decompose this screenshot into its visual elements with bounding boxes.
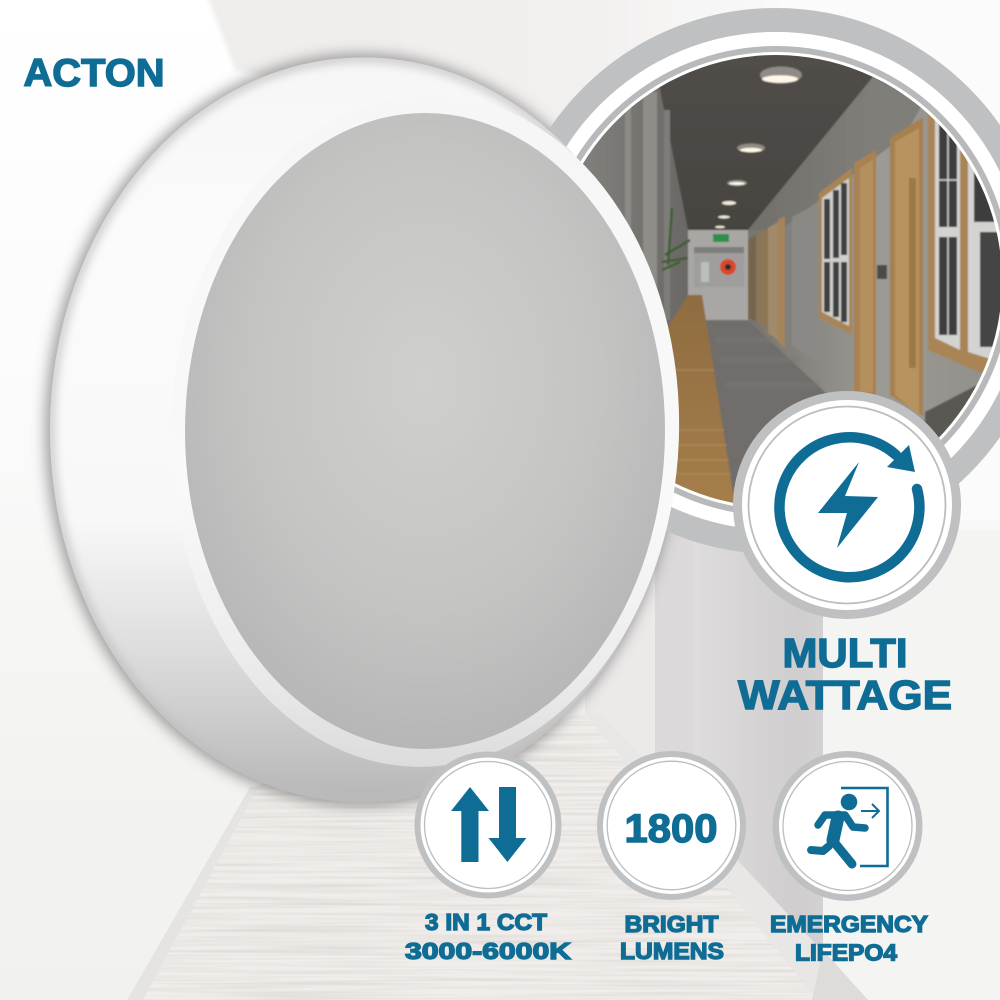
fire reel bbox=[720, 259, 736, 275]
label: emergency LiFePO4: LIFEPO4 bbox=[795, 940, 897, 966]
title: ACTON bbox=[24, 52, 164, 95]
concrete floor bbox=[771, 343, 826, 395]
label: bright lumens: BRIGHT bbox=[624, 911, 719, 937]
far windows and doors bbox=[748, 235, 756, 322]
photo inset: lit corridor bbox=[515, 20, 1000, 542]
big window bbox=[928, 114, 988, 374]
value: 1800: 1800 bbox=[624, 807, 718, 851]
left wall bbox=[583, 100, 642, 250]
label: bright lumens bbox=[620, 911, 724, 964]
badge: emergency bbox=[772, 751, 922, 901]
plant bbox=[662, 208, 690, 270]
door bbox=[854, 150, 876, 395]
big door bbox=[890, 117, 923, 416]
badge: lumens bbox=[597, 751, 746, 900]
product: round bulkhead light bbox=[50, 58, 691, 802]
label: multi wattage: WATTAGE bbox=[738, 672, 952, 718]
exit sign bbox=[713, 234, 729, 242]
icon: power cycle bbox=[779, 437, 919, 577]
label: multi wattage: MULTI bbox=[782, 630, 908, 676]
window near bbox=[819, 168, 852, 335]
right wall bbox=[749, 77, 982, 422]
label: emergency LiFePO4 bbox=[770, 911, 928, 966]
product shadow on wall bbox=[45, 54, 677, 806]
label: emergency LiFePO4: EMERGENCY bbox=[770, 911, 928, 937]
label: 3 in 1 CCT: 3 IN 1 CCT bbox=[425, 909, 548, 935]
label: multi wattage bbox=[738, 630, 952, 718]
label: bright lumens: LUMENS bbox=[620, 938, 724, 964]
icon: running man to exit bbox=[811, 788, 888, 866]
label: 3 in 1 CCT: 3000-6000K bbox=[405, 938, 571, 964]
switch plate bbox=[877, 265, 887, 279]
ceiling lights bbox=[715, 66, 802, 228]
label: 3 in 1 CCT bbox=[405, 909, 571, 964]
floor with stripes bbox=[144, 713, 814, 1000]
wood floor strip bbox=[666, 295, 735, 505]
corridor ceiling bbox=[660, 55, 873, 230]
white door bbox=[792, 209, 807, 348]
badge: colour temperature bbox=[414, 752, 562, 898]
icon: up and down arrows bbox=[451, 787, 526, 862]
end wall bbox=[688, 230, 748, 320]
badge: multi wattage bbox=[733, 391, 961, 619]
